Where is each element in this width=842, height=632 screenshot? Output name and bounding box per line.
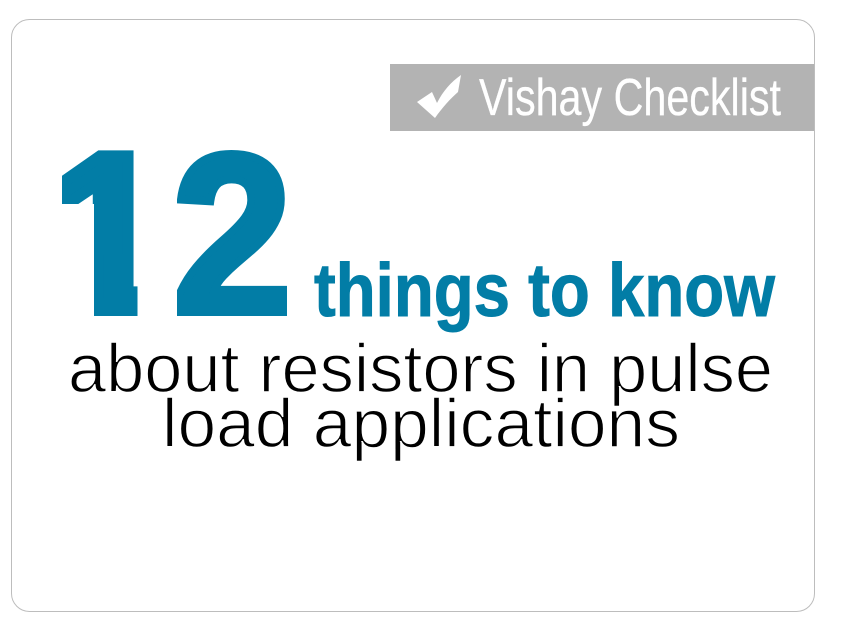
- digit 1: 1: [48, 107, 168, 366]
- subtitle line 2: load applications: [162, 385, 680, 462]
- big number 12: [62, 150, 287, 316]
- subtitle line 1: about resistors in pulse: [68, 330, 773, 407]
- banner: Vishay Checklist: [390, 64, 814, 131]
- heading: things to know: things to know: [314, 248, 776, 332]
- icon: check mark: [417, 75, 461, 118]
- digit 2: 2: [172, 107, 292, 366]
- subtitle: [68, 330, 773, 462]
